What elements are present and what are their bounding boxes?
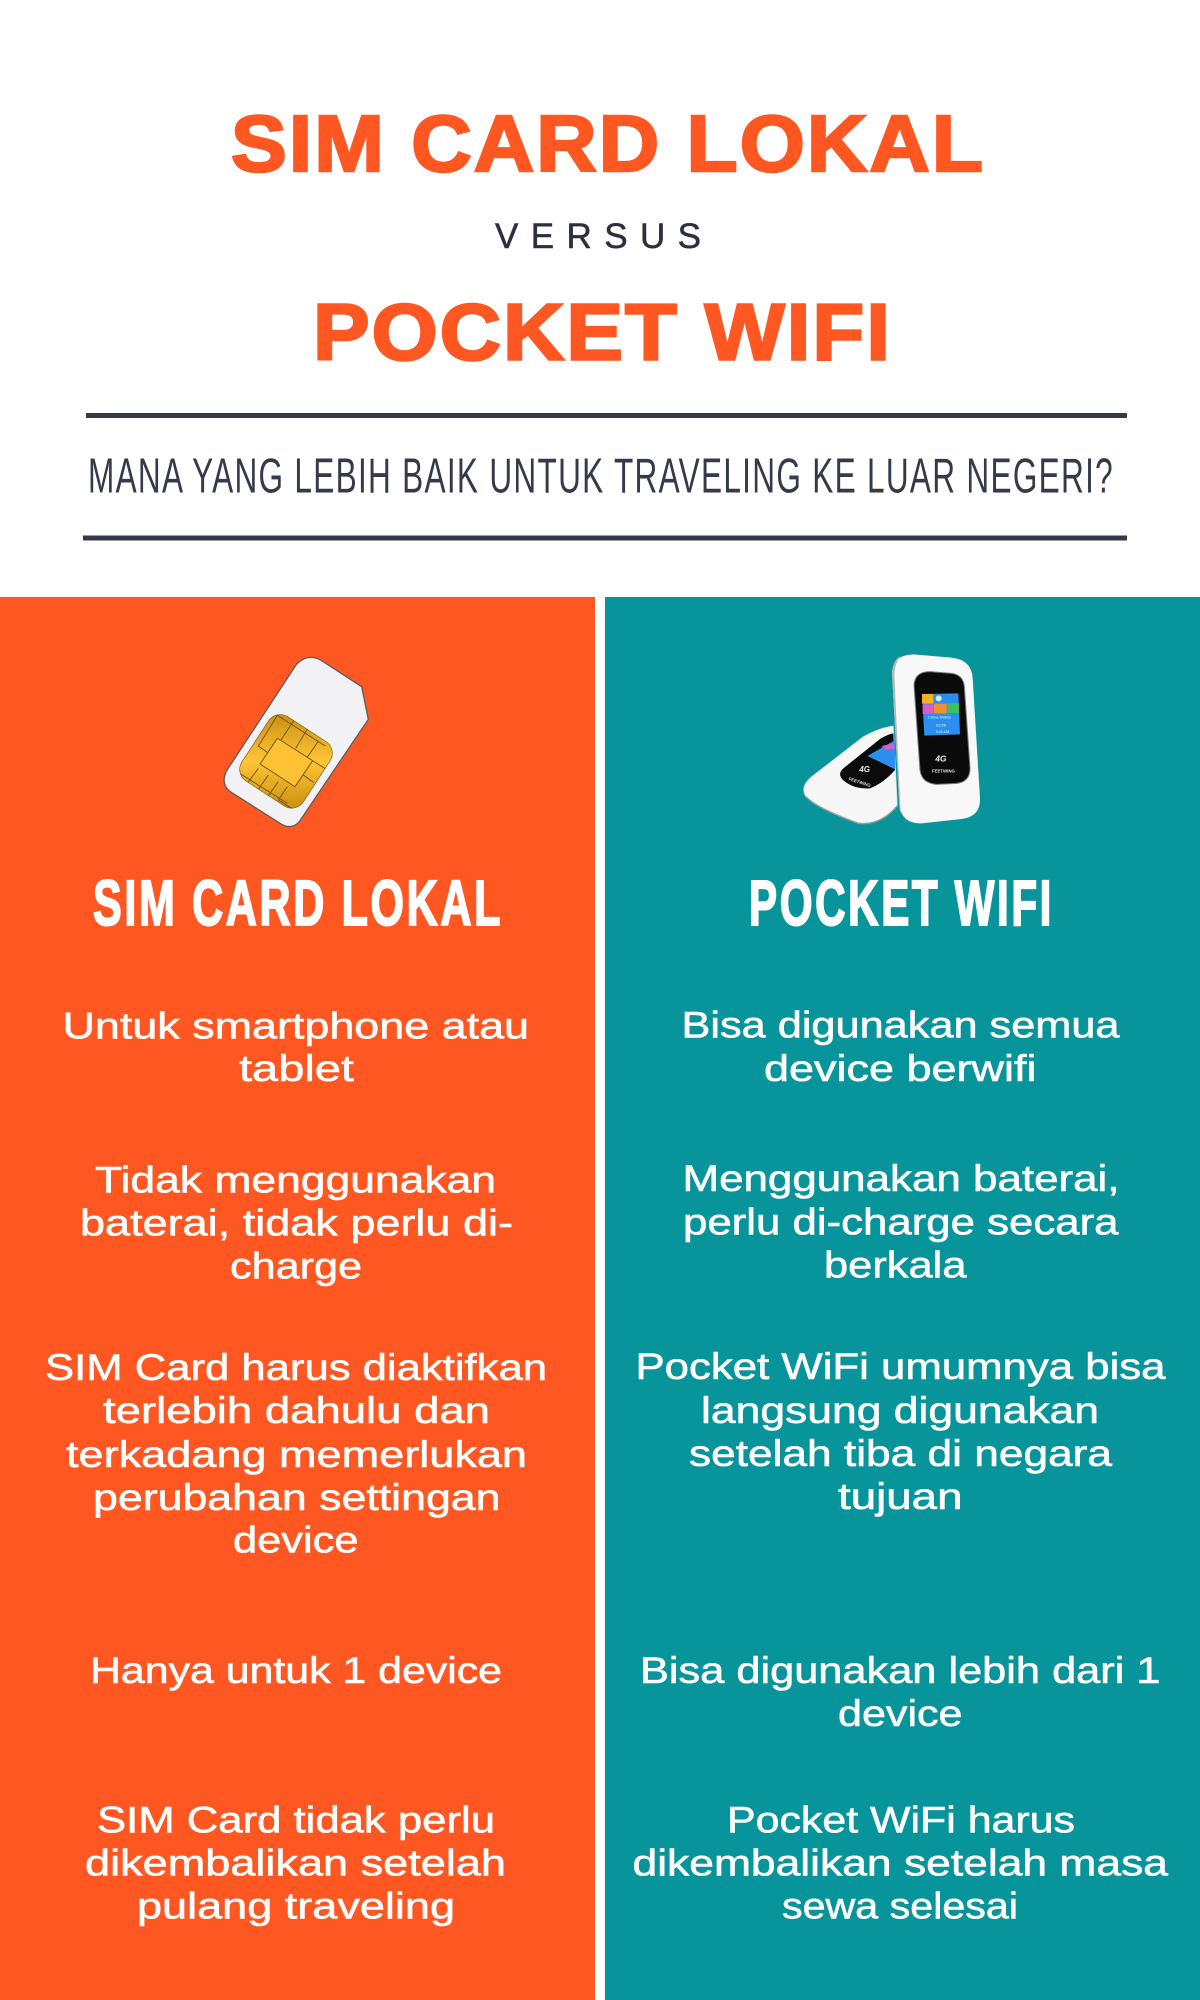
icon: SIM card bbox=[224, 657, 368, 827]
text: must return: dikembalikan setelah masa bbox=[632, 1842, 1169, 1884]
icon: pocket wifi devices: 09:56 bbox=[936, 722, 947, 727]
text: battery: Tidak menggunakan bbox=[95, 1160, 496, 1200]
title: Pocket WiFi: POCKET WIFI bbox=[313, 288, 892, 376]
heading: Pocket WiFi: POCKET WIFI bbox=[749, 867, 1054, 939]
text: no return bbox=[85, 1800, 506, 1926]
text: activation: setelah tiba di negara bbox=[689, 1433, 1113, 1474]
text: versus: VERSUS bbox=[495, 217, 701, 256]
text: battery: charge bbox=[230, 1246, 362, 1286]
subtitle with rules bbox=[83, 413, 1127, 540]
icon: pocket wifi devices bbox=[804, 654, 980, 824]
text: activation bbox=[45, 1347, 547, 1560]
text: activation: terkadang memerlukan bbox=[66, 1434, 527, 1475]
icon: pocket wifi devices: 4G bbox=[934, 753, 947, 763]
text: must return bbox=[632, 1800, 1169, 1926]
text: single device: Hanya untuk 1 device bbox=[90, 1650, 502, 1691]
text: device support: tablet bbox=[239, 1048, 355, 1089]
text: device support bbox=[682, 1004, 1120, 1089]
text: activation: SIM Card harus diaktifkan bbox=[45, 1347, 547, 1388]
text: device support: Untuk smartphone atau bbox=[62, 1006, 529, 1046]
icon: pocket wifi devices: China Mobile bbox=[928, 715, 952, 720]
text: no return: SIM Card tidak perlu bbox=[97, 1800, 495, 1840]
text: device support: device berwifi bbox=[764, 1048, 1036, 1089]
text: activation: tujuan bbox=[838, 1476, 962, 1517]
text: multiple devices bbox=[640, 1650, 1160, 1734]
text: multiple devices: device bbox=[838, 1693, 962, 1734]
icon: pocket wifi devices: FEETWING bbox=[932, 768, 955, 773]
title: SIM Card Lokal: SIM CARD LOKAL bbox=[231, 99, 985, 188]
heading: SIM Card Lokal: SIM CARD LOKAL bbox=[93, 867, 503, 939]
text: activation: perubahan settingan bbox=[93, 1477, 500, 1518]
icon: pocket wifi devices: 4G bbox=[858, 765, 870, 774]
text: multiple devices: Bisa digunakan lebih dari 1 bbox=[640, 1650, 1160, 1691]
text: device support: Bisa digunakan semua bbox=[682, 1004, 1120, 1046]
text: must return: Pocket WiFi harus bbox=[727, 1800, 1075, 1840]
panel: Pocket WiFi bbox=[605, 597, 1200, 2000]
text: activation: Pocket WiFi umumnya bisa bbox=[636, 1346, 1166, 1387]
text: must return: sewa selesai bbox=[782, 1886, 1018, 1926]
text: activation: terlebih dahulu dan bbox=[103, 1390, 490, 1431]
text: battery: Menggunakan baterai, bbox=[682, 1158, 1120, 1199]
icon: pocket wifi devices: 518.1M bbox=[936, 729, 949, 734]
text: activation: langsung digunakan bbox=[701, 1390, 1099, 1431]
text: device support bbox=[62, 1006, 529, 1089]
text: battery bbox=[682, 1158, 1120, 1286]
text: battery bbox=[80, 1160, 513, 1286]
text: battery: berkala bbox=[824, 1244, 967, 1286]
text: activation: device bbox=[233, 1520, 358, 1560]
panel: SIM Card Lokal bbox=[0, 597, 595, 2000]
text: activation bbox=[636, 1346, 1166, 1517]
text: no return: dikembalikan setelah bbox=[85, 1842, 506, 1884]
text: battery: perlu di-charge secara bbox=[683, 1202, 1119, 1242]
text: battery: baterai, tidak perlu di- bbox=[80, 1202, 513, 1244]
icon: pocket wifi devices: FEETWING bbox=[848, 776, 872, 788]
text: no return: pulang traveling bbox=[137, 1886, 455, 1926]
